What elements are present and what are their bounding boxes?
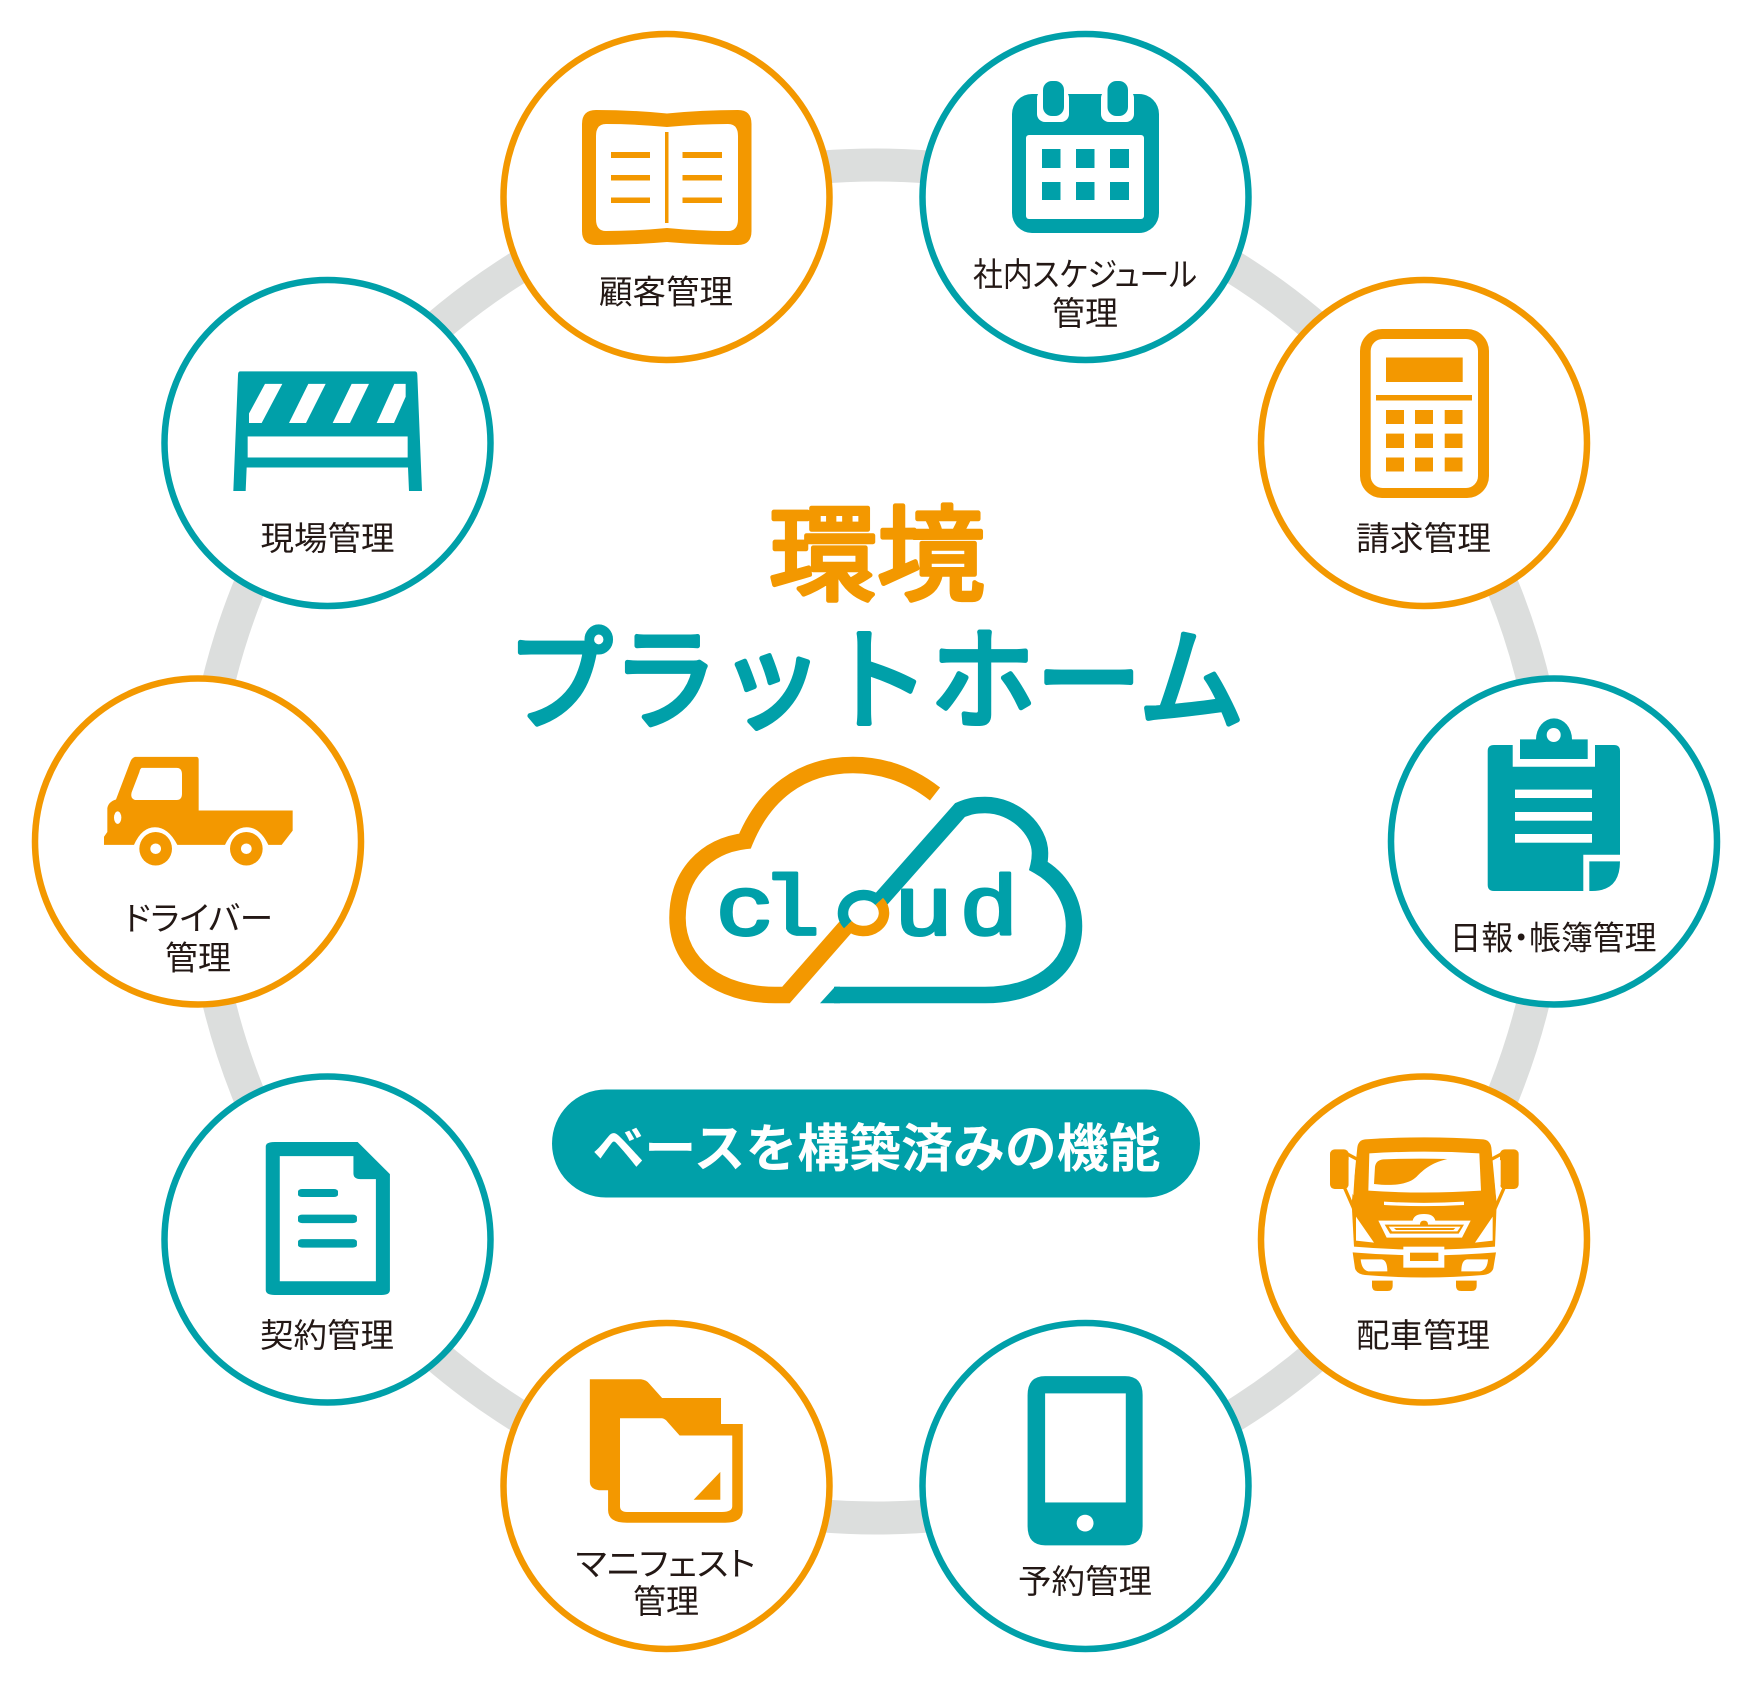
circle outline	[1261, 280, 1587, 606]
word: cloud: cloud	[716, 866, 1018, 960]
label: 管理	[633, 1575, 699, 1623]
panel: contract management	[164, 1076, 490, 1402]
label: 現場管理	[260, 512, 394, 560]
panel: daily report and ledger management	[1391, 678, 1717, 1004]
orange half of cloud outline	[678, 765, 935, 995]
panel: customer management	[504, 34, 830, 360]
circle outline	[504, 34, 830, 360]
panel: reservation management	[922, 1323, 1248, 1649]
icon: front-view truck	[1330, 1137, 1519, 1291]
label: 社内スケジュール	[973, 248, 1197, 296]
pill background	[552, 1090, 1200, 1198]
label: 管理	[165, 932, 231, 980]
circle outline	[164, 280, 490, 606]
circle outline	[164, 1076, 490, 1402]
label	[576, 1538, 756, 1623]
panel: driver management	[35, 678, 361, 1004]
heading: platform: プラットホーム	[506, 591, 1244, 753]
pill text: ベースを構築済みの機能	[592, 1107, 1160, 1182]
label	[124, 892, 273, 980]
panel: dispatch management	[1261, 1076, 1587, 1402]
circle outline	[1261, 1076, 1587, 1402]
icon: clipboard	[1488, 718, 1620, 891]
label: 配車管理	[1356, 1309, 1490, 1357]
label: マニフェスト	[576, 1538, 756, 1586]
heading: environment: 環境	[769, 471, 985, 622]
icon: calendar	[1012, 81, 1159, 233]
ring letter o, teal arc	[843, 895, 879, 925]
icon: folders	[590, 1379, 743, 1523]
ring letter o, orange arc	[848, 901, 884, 931]
label: 管理	[1052, 287, 1118, 335]
circle outline	[504, 1323, 830, 1649]
circle outline	[922, 1323, 1248, 1649]
circle outline	[922, 34, 1248, 360]
icon: document	[266, 1142, 390, 1295]
panel: site management	[164, 280, 490, 606]
circle outline	[1391, 678, 1717, 1004]
label: 予約管理	[1018, 1555, 1152, 1603]
icon: road barricade	[233, 371, 422, 491]
icon: tablet	[1028, 1376, 1143, 1545]
label: 日報・帳簿管理	[1450, 912, 1656, 960]
panel: internal schedule management	[922, 34, 1248, 360]
connecting grey ring	[200, 165, 1552, 1518]
panel: invoice management	[1261, 280, 1587, 606]
circle outline	[35, 678, 361, 1004]
logo: cloud	[678, 765, 1074, 1003]
badge: base features already built	[552, 1090, 1200, 1198]
icon: open book	[582, 110, 752, 245]
teal half of cloud outline	[834, 805, 1074, 995]
label: 顧客管理	[599, 266, 733, 314]
icon: pickup truck	[104, 757, 293, 865]
label: ドライバー	[124, 892, 273, 940]
teal cloud tail tip	[820, 987, 840, 1003]
label	[973, 248, 1197, 335]
label: 請求管理	[1356, 512, 1491, 560]
panel: manifest management	[504, 1323, 830, 1649]
label: 契約管理	[260, 1309, 394, 1357]
icon: calculator	[1360, 329, 1489, 498]
